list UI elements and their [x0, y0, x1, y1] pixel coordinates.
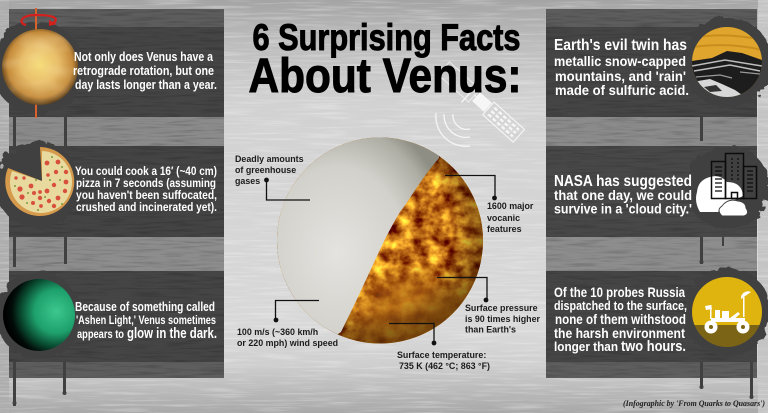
credit line: (Infographic by 'From Quarks to Quasars')	[623, 399, 765, 408]
callout: surface pressure	[437, 278, 541, 334]
text: Russian probes fact: the harsh environment	[554, 326, 685, 341]
text: evil twin fact: metallic snow-capped	[554, 53, 686, 69]
icon: glowing green Venus	[3, 279, 75, 351]
callout: greenhouse gases: of greenhouse	[235, 165, 296, 175]
callout: greenhouse gases: Deadly amounts	[235, 154, 304, 164]
callout: volcanic features: 1600 major	[487, 201, 534, 211]
callout: wind speed	[237, 300, 338, 348]
callout: surface pressure: Surface pressure	[465, 303, 538, 313]
text: ashen light fact	[75, 299, 217, 342]
callout: greenhouse gases	[235, 154, 310, 200]
text: Russian probes fact: longer than	[554, 339, 618, 354]
text: Russian probes fact: Of the 10 probes Russia	[554, 284, 685, 300]
title	[248, 17, 522, 103]
callout: wind speed: or 220 mph) wind speed	[237, 338, 338, 348]
icon: rover on yellow planet	[692, 277, 762, 349]
callout: volcanic features: vocanic	[487, 213, 520, 223]
panel: right column	[546, 9, 757, 378]
text: pizza fact: pizza in 7 seconds (assuming	[76, 176, 216, 190]
title: About Venus:	[248, 50, 522, 103]
text: Russian probes fact	[554, 284, 687, 355]
callout: volcanic features: features	[487, 224, 522, 234]
callout: surface pressure: than Earth's	[465, 324, 516, 334]
title: 6 Surprising Facts	[252, 17, 520, 58]
callout: surface pressure: is 90 times higher	[465, 314, 541, 324]
text: pizza fact: You could cook a 16′ (~40 cm)	[75, 164, 217, 178]
text: Russian probes fact: dispatched to the surface,	[554, 298, 687, 313]
text: ashen light fact: 'Ashen Light,' Venus sometimes	[76, 313, 216, 327]
text: pizza fact: crushed and incinerated yet).	[76, 200, 217, 214]
callout: surface temperature: 735 K (462 °C; 863 °F)	[399, 361, 490, 371]
text: ashen light fact: Because of something called	[75, 299, 215, 314]
text: retrograde rotation fact: retrograde rotation, but one	[73, 63, 214, 78]
icon: rotating Venus	[2, 8, 78, 118]
text: Russian probes fact: two hours.	[621, 338, 686, 355]
icon: mountain landscape	[692, 27, 762, 97]
text: pizza fact: you haven't been suffocated,	[76, 188, 217, 202]
text: evil twin fact: Earth's evil twin has	[554, 37, 687, 54]
text: retrograde rotation fact: Not only does Venus have a	[74, 49, 214, 64]
text: cloud city fact	[554, 173, 692, 216]
text: ashen light fact: glow in the dark.	[127, 326, 217, 342]
text: cloud city fact: that one day, we could	[554, 187, 692, 203]
panel: left column	[9, 9, 224, 378]
icon: pizza	[5, 147, 74, 216]
planet Venus cutaway	[270, 137, 484, 350]
text: evil twin fact: mountains, and 'rain'	[555, 68, 686, 84]
icon: cloud city	[696, 154, 756, 216]
callout: volcanic features	[445, 176, 534, 234]
callout: surface temperature	[389, 324, 490, 371]
text: cloud city fact: NASA has suggested	[554, 173, 692, 190]
text: retrograde rotation fact: day lasts longer than a year.	[75, 77, 217, 92]
text: evil twin fact	[554, 37, 689, 98]
text: cloud city fact: survive in a 'cloud city.'	[554, 200, 692, 216]
callout: wind speed: 100 m/s (~360 km/h	[237, 327, 318, 337]
text: evil twin fact: made of sulfuric acid.	[555, 82, 689, 98]
text: ashen light fact: appears to	[77, 329, 124, 341]
text: pizza fact	[75, 164, 217, 214]
icon: satellite	[435, 58, 528, 146]
callout: greenhouse gases: gases	[235, 176, 260, 186]
text: retrograde rotation fact	[73, 49, 217, 92]
callout: surface temperature: Surface temperature:	[397, 350, 486, 360]
text: Russian probes fact: none of them withstood	[555, 312, 686, 327]
